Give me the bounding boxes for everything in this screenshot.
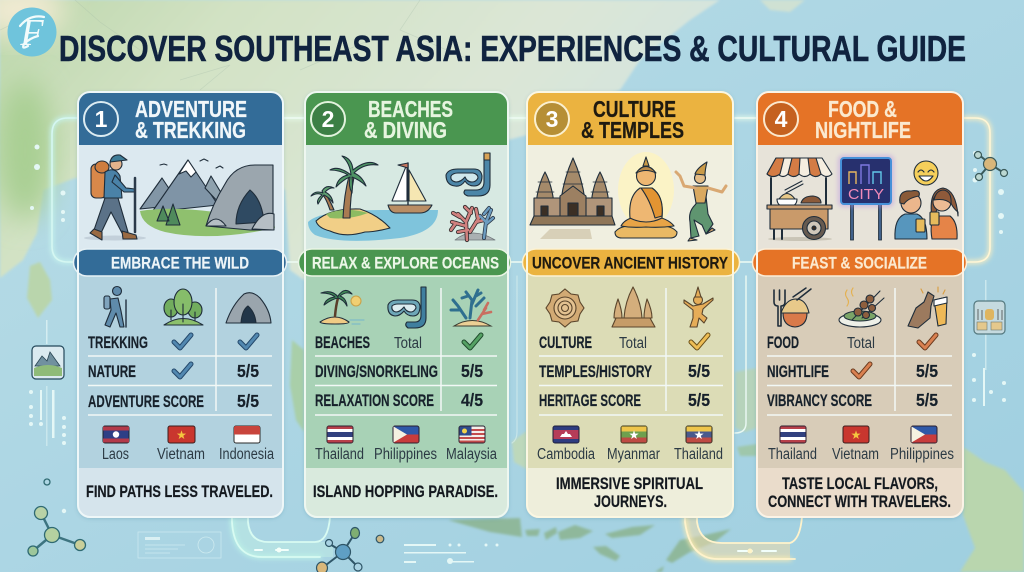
tagline pill: FEAST & SOCIALIZE: [792, 254, 927, 272]
illustration: neon city sign: CITY: [848, 186, 884, 203]
comparison table: [539, 288, 723, 415]
flag: Myanmar: [621, 426, 647, 443]
icon: temple small: [612, 287, 655, 327]
country names: Thailand: [315, 446, 364, 463]
comparison table: NIGHTLIFE: [767, 363, 829, 381]
decorative data panel: [138, 532, 221, 558]
country names: [537, 446, 723, 463]
icon: left map badge: [32, 346, 64, 379]
country names: Cambodia: [537, 446, 595, 463]
country names: Philippines: [890, 446, 954, 463]
icon: dancer small: [684, 287, 713, 327]
country names: Vietnam: [832, 446, 879, 463]
header: ADVENTURE: [135, 96, 247, 122]
comparison table: VIBRANCY SCORE: [767, 392, 872, 410]
flag: Vietnam: ★: [851, 428, 861, 442]
header: 1: [95, 106, 108, 132]
comparison table: RELAXATION SCORE: [315, 392, 434, 410]
icon: hiker: [104, 286, 126, 327]
header: [757, 92, 963, 145]
tagline pill: EMBRACE THE WILD: [111, 254, 249, 272]
illustration: dancer: [676, 162, 726, 241]
comparison table: [767, 288, 952, 415]
header: BEACHES: [368, 96, 453, 122]
footer text: [768, 475, 951, 511]
illustration: hiker: [84, 155, 146, 240]
header: 3: [546, 106, 558, 132]
footer text: TASTE LOCAL FLAVORS,: [782, 475, 938, 493]
flag: Thailand: [327, 426, 353, 443]
comparison table: TEMPLES/HISTORY: [539, 363, 652, 381]
header: & TREKKING: [135, 117, 246, 143]
flag: Thailand labelled card three: [686, 426, 712, 443]
illustration: street food cart: [767, 158, 832, 241]
country names: [102, 446, 274, 463]
comparison table: 5/5: [916, 361, 938, 381]
illustration: sailboat: [388, 163, 432, 213]
header: 2: [322, 106, 334, 132]
tagline pill: [74, 249, 286, 276]
country names: Indonesia: [219, 446, 274, 463]
logo badge: F: [19, 12, 44, 54]
panel: culture and temples: [522, 92, 740, 517]
icon: trees: [164, 289, 203, 325]
footer text: CONNECT WITH TRAVELERS.: [768, 493, 951, 511]
molecule: top right: [974, 152, 1008, 180]
footer text: JOURNEYS.: [594, 493, 667, 511]
flag: Philippines: [393, 426, 419, 443]
comparison table: HERITAGE SCORE: [539, 392, 641, 410]
header: 4: [775, 106, 788, 132]
tagline pill: [522, 249, 740, 276]
country names: Laos: [102, 446, 129, 463]
comparison table: 5/5: [688, 390, 710, 410]
flag: Vietnam: [168, 426, 195, 443]
flag: Cambodia: [553, 426, 579, 443]
flag: Myanmar: ★: [629, 428, 639, 442]
molecule: bottom centre: [316, 528, 384, 572]
comparison table: FOOD: [767, 334, 799, 352]
country names: Myanmar: [607, 446, 660, 463]
comparison table: CULTURE: [539, 334, 592, 352]
icon: cave small: [226, 293, 271, 323]
tagline pill: UNCOVER ANCIENT HISTORY: [532, 254, 728, 272]
header: [527, 92, 733, 145]
illustration: friends cheering: [895, 161, 958, 239]
illustration: coral: [451, 207, 495, 240]
header: NIGHTLIFE: [815, 117, 911, 143]
illustration: temple: [530, 158, 615, 239]
comparison table: [315, 288, 497, 415]
illustration: cave: [206, 165, 274, 230]
header: [78, 92, 283, 145]
comparison table: DIVING/SNORKELING: [315, 363, 438, 381]
illustration: mountains: [140, 159, 275, 236]
comparison table: NATURE: [88, 363, 136, 381]
glowing connector lines: [52, 118, 990, 559]
footer text: [556, 475, 703, 511]
header: [305, 92, 508, 145]
comparison table: 5/5: [237, 391, 259, 411]
header: CULTURE: [593, 96, 676, 122]
comparison table: Total: [619, 335, 647, 352]
country names: [315, 446, 497, 463]
flag: Thailand: [780, 426, 806, 443]
illustration: mask and snorkel: [446, 153, 490, 196]
panel: beaches and diving: [298, 92, 510, 517]
header: & DIVING: [364, 117, 447, 143]
comparison table: ADVENTURE SCORE: [88, 393, 204, 411]
header: FOOD &: [828, 96, 897, 122]
comparison table: 5/5: [237, 361, 259, 381]
country names: Thailand: [674, 446, 723, 463]
icon: skewers on plate: [839, 288, 884, 327]
comparison table: 5/5: [688, 361, 710, 381]
flag: Indonesia: [234, 426, 260, 443]
comparison table: TREKKING: [88, 334, 148, 352]
flag: Vietnam: ★: [176, 428, 187, 442]
country names: Philippines: [374, 446, 437, 463]
decorative dots and data lines: [29, 144, 1006, 564]
country names: Vietnam: [157, 446, 205, 463]
logo badge: [8, 8, 56, 56]
comparison table: 4/5: [461, 390, 483, 410]
footer text: IMMERSIVE SPIRITUAL: [556, 475, 703, 493]
country names: [768, 446, 954, 463]
icon: mandala: [546, 289, 584, 327]
comparison table: 5/5: [461, 361, 483, 381]
comparison table: Total: [394, 335, 422, 352]
country names: Thailand: [768, 446, 817, 463]
icon: coral small: [451, 290, 491, 326]
header: & TEMPLES: [581, 117, 684, 143]
tagline pill: [752, 249, 966, 276]
icon: mask small: [388, 287, 426, 328]
footer text: ISLAND HOPPING PARADISE.: [313, 483, 498, 501]
illustration: Buddha: [615, 152, 677, 238]
flag: Malaysia: [459, 426, 485, 443]
flag: Thailand labelled card three: ★: [694, 428, 704, 442]
footer text: FIND PATHS LESS TRAVELED.: [86, 483, 273, 501]
illustration: palm island: [308, 156, 438, 241]
icon: right temple badge: [974, 301, 1005, 334]
icon: palm beach: [320, 290, 364, 324]
tagline pill: RELAX & EXPLORE OCEANS: [312, 254, 499, 272]
comparison table: BEACHES: [315, 334, 370, 352]
panel: adventure and trekking: [74, 92, 286, 517]
flag: Laos: [103, 426, 129, 443]
comparison table: Total: [847, 335, 875, 352]
comparison table: [88, 288, 272, 415]
molecule: bottom left: [28, 479, 86, 556]
panel: food and nightlife: [752, 92, 966, 517]
tagline pill: [298, 249, 510, 276]
icon: cheers: [908, 287, 947, 328]
illustration: neon city sign: [838, 155, 894, 240]
flag: Philippines: [911, 426, 937, 443]
country names: Malaysia: [446, 446, 497, 463]
flag: Vietnam: [843, 426, 869, 443]
comparison table: 5/5: [916, 390, 938, 410]
icon: fork and noodles: [774, 288, 811, 327]
